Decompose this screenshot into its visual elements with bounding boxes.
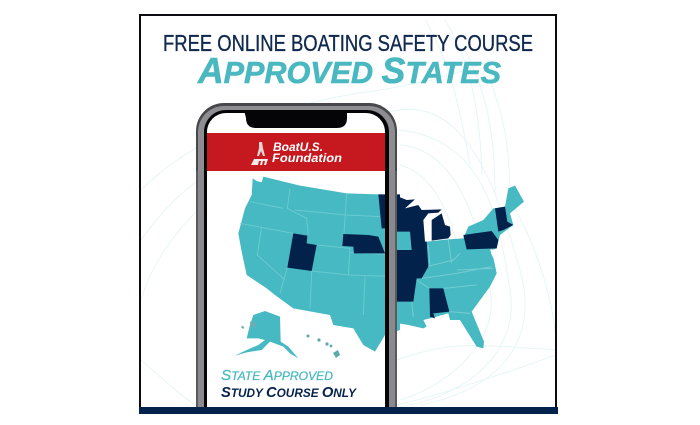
phone notch	[244, 110, 347, 128]
logo: BoatU.S. Foundation: Foundation	[272, 153, 342, 165]
phone body	[196, 103, 397, 384]
map: nebraska	[342, 234, 385, 253]
map: western states	[238, 177, 400, 352]
map: hawaii	[306, 334, 340, 358]
bottom navy bar	[139, 407, 558, 414]
legend: state approved: STATE APPROVED	[221, 367, 333, 384]
map: minnesota edge	[378, 194, 400, 228]
background contour lines	[141, 20, 556, 407]
logo: BoatU.S. Foundation	[251, 142, 342, 165]
US map	[235, 177, 524, 358]
header bar: red	[207, 133, 385, 171]
title: FREE ONLINE BOATING SAFETY COURSE	[163, 30, 533, 56]
phone rails over map	[196, 171, 397, 407]
map: michigan	[432, 213, 451, 241]
map: iowa	[387, 232, 412, 250]
subtitle: approved states: APPROVED STATES	[197, 50, 501, 91]
map: eastern state borders	[412, 240, 493, 317]
map: midwest navy block	[387, 195, 442, 302]
map: alabama	[429, 288, 449, 318]
map: chesapeake bay	[491, 249, 495, 259]
map: western state borders	[240, 188, 400, 315]
map: utah	[287, 233, 317, 271]
map: eastern states	[387, 186, 524, 348]
map: pennsylvania	[463, 231, 498, 249]
map: new england navy	[495, 207, 513, 232]
legend: study course only: STUDY COURSE ONLY	[221, 384, 357, 401]
logo: BoatU.S. Foundation: BoatU.S.	[273, 142, 323, 154]
map: alaska	[235, 311, 298, 358]
frame border	[140, 15, 556, 413]
